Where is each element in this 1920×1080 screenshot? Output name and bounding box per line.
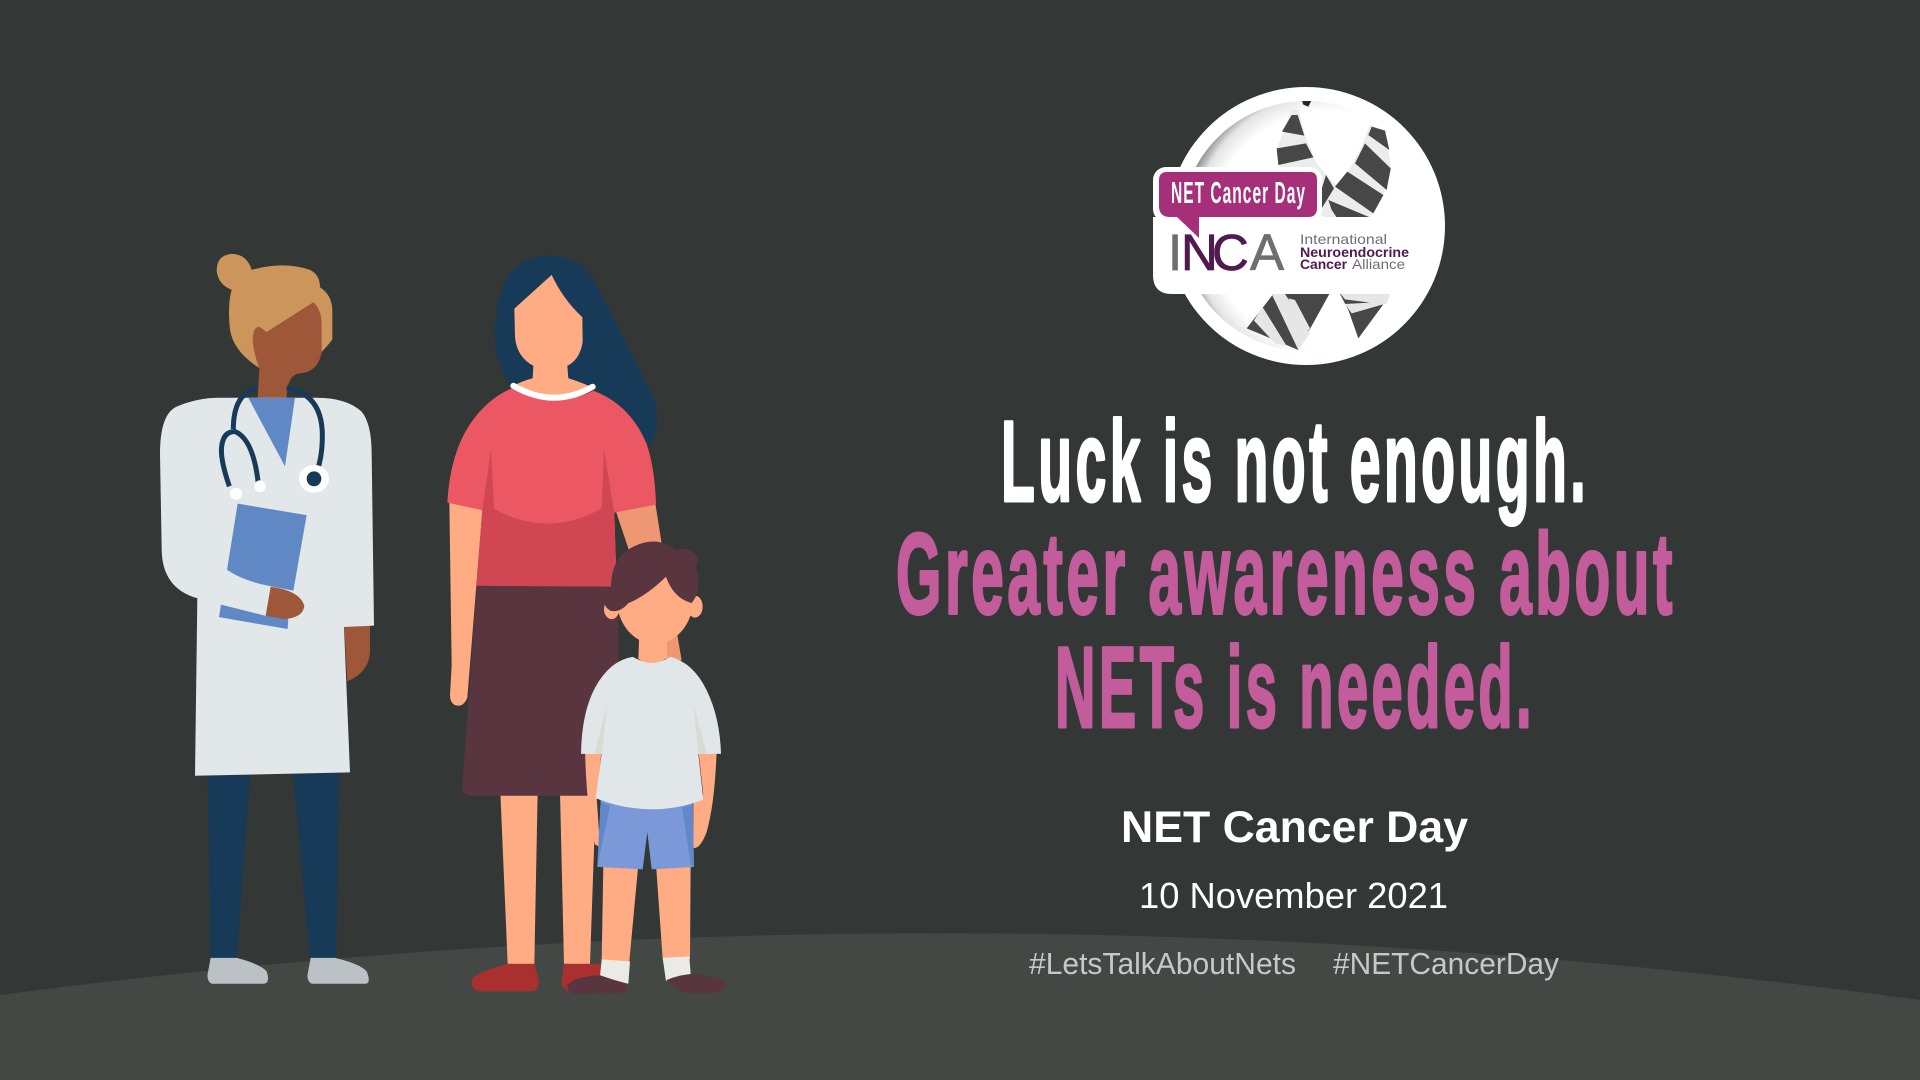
headline [896,398,1676,752]
callout: NET Cancer Day: NET Cancer Day [1171,175,1306,210]
INCA wordmark: I [1168,224,1182,281]
mother shirt shade [477,449,617,587]
figure: child [567,542,727,994]
doctor hand [344,623,370,681]
INCA wordmark: A [1250,224,1284,281]
child hair [605,542,699,611]
logo: NET Cancer Day INCA badge [1153,87,1445,365]
doctor legs [208,772,339,959]
logo outer ring [1167,87,1445,365]
child legs [602,862,691,961]
child arms [585,750,717,848]
doctor face [253,302,322,399]
child neck [638,633,667,663]
ribbon lower part [1247,294,1390,350]
hashtags: #LetsTalkAboutNets [1029,946,1296,981]
stethoscope [221,388,329,500]
doctor coat [160,398,374,776]
mother hair [495,256,657,446]
ground hill [0,933,1920,1080]
logo white band [1153,217,1420,294]
event name: NET Cancer Day [1121,803,1468,852]
callout: NET Cancer Day [1153,167,1322,238]
doctor hair [217,254,332,368]
mother skirt [462,586,619,796]
mother legs [500,792,596,964]
clipboard [219,504,307,629]
event date: 10 November 2021 [1139,875,1448,916]
organisation name: Neuroendocrine [1300,244,1409,260]
figure: doctor [160,254,374,984]
child head [604,552,703,644]
figure: mother [447,256,682,991]
organisation name: Cancer [1300,256,1348,272]
child shirt [581,657,721,809]
INCA wordmark: N [1181,224,1218,281]
child shorts shade [597,802,694,867]
organisation name [1300,231,1409,272]
child shoes [567,974,727,994]
doctor scrubs [248,398,295,466]
mother shirt [447,388,656,586]
child shirt folds [594,703,707,754]
hashtags [1029,946,1559,981]
doctor shoes [207,958,369,984]
child socks [600,956,691,984]
mother right arm [615,501,682,660]
hashtags: #NETCancerDay [1333,946,1559,981]
child shorts [597,800,694,869]
INCA wordmark: C [1212,224,1249,281]
organisation name: Alliance [1352,256,1405,272]
mother shoes [472,964,628,991]
mother collar [513,386,593,398]
zebra ribbon [1247,100,1392,350]
doctor holding hand [266,587,304,619]
ribbon upper part [1277,100,1392,217]
organisation name: International [1300,231,1387,247]
mother neck and face [513,275,593,398]
logo inner disc with shadow [1181,101,1431,351]
mother left arm [449,501,483,706]
